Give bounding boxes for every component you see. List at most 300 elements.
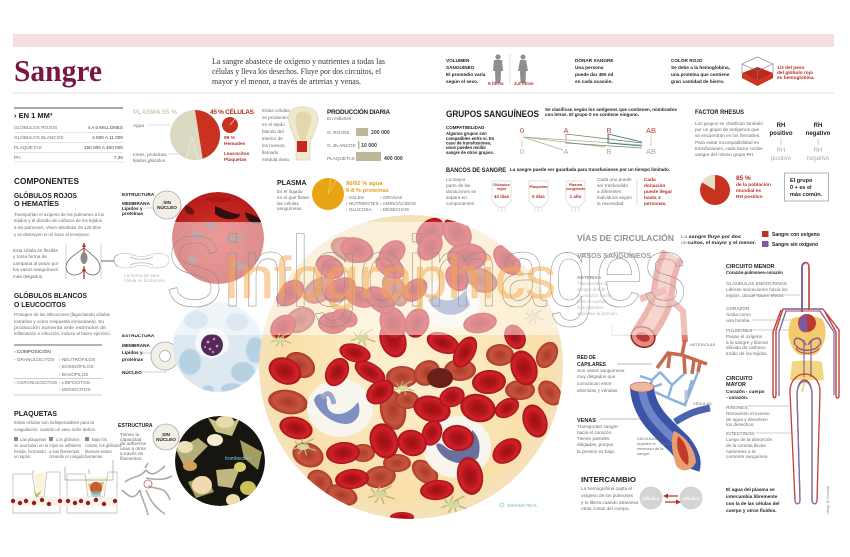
photo circle: platelets (175, 416, 265, 506)
text: circuito mayor: INTESTINOS: (726, 431, 755, 436)
panel: compatibilidad: COMPATIBILIDAD (446, 125, 485, 130)
chart: blood group compatibility (520, 126, 656, 156)
text: bone marrow (262, 108, 290, 162)
list: composición: › GRANULOCITOS (14, 357, 54, 362)
panel: intercambio: CÉLULA (643, 496, 659, 501)
text: water exchange: El agua del plasma se (726, 487, 775, 492)
intro text: mayor y el menor, a través de arterias y venas. (212, 77, 361, 86)
icon: biconcave cell (101, 253, 169, 283)
list: composición: › LINFOCITOS (59, 380, 90, 385)
heading: componentes: COMPONENTES (14, 176, 79, 186)
header fact: volumen sanguíneo: 5 litros (488, 81, 504, 87)
callout: donation: donación (644, 183, 665, 189)
illustration: capillary network (640, 340, 707, 405)
watermark band (118, 222, 688, 335)
label: válvulas (637, 436, 678, 456)
illustration: artery (628, 255, 716, 351)
text: plaquetas steps: rojos se adhieren (49, 443, 82, 448)
text: plasma: PLASMA (277, 180, 307, 187)
panel: intercambio: oxígeno de los pulmones (581, 493, 634, 498)
white blood cells (307, 278, 491, 478)
pie chart: 85 percent: RH positivo (736, 194, 763, 200)
text: plaquetas: Estas células son indispensables para la (14, 420, 94, 425)
label: válvulas: Impiden el (637, 441, 656, 446)
structure label: red cell: proteínas (122, 211, 143, 216)
text: circuito menor: traído de los tejidos. (726, 351, 768, 356)
heading: vías de circulación: La sangre fluye por dos (681, 234, 741, 239)
icon: blood bags: rojos (497, 187, 506, 191)
intro text (212, 57, 385, 86)
pie chart: plasma and cells: lípidos,glúcidos (133, 158, 166, 163)
heading: vías de circulación: circuitos, el mayor y el menor. (681, 240, 756, 245)
bar chart: daily production (327, 107, 403, 162)
text: bone marrow: interior de (262, 136, 283, 141)
text: water exchange: cuerpo y otros fluidos. (726, 508, 777, 513)
structure label: platelets: SIN (162, 432, 171, 437)
panel: factor rhesus: Los grupos se clasifican también (695, 121, 763, 126)
text: plaquetas steps: Bajo los (92, 437, 107, 442)
pie chart: plasma and cells: Plaquetas (224, 157, 247, 163)
icon: biconcave cell: La forma de esta (124, 273, 160, 278)
header fact: volumen sanguíneo: SANGUÍNEO (446, 63, 475, 70)
text: transfusion (597, 177, 632, 206)
list: plasma composition: › GLUCOSA (346, 207, 373, 212)
text: circuito menor: Liberan secreciones hacia los (726, 287, 788, 292)
text: plaquetas steps: herida, formando (14, 449, 46, 454)
panel: en 1 mm3: 4 500 A 11 000 (92, 135, 123, 140)
heading: grupos sanguíneos: GRUPOS SANGUÍNEOS (446, 109, 539, 120)
text: blood banks: parte de las (446, 183, 471, 188)
chart: blood group compatibility: A (563, 126, 569, 135)
heading: grupos sanguíneos: Se clasifican según los antígenos que contienen, nombrados (545, 107, 677, 112)
text: blood banks: La mayor (446, 177, 466, 182)
text: transfusion: ser trasfundido (597, 183, 628, 188)
panel: factor rhesus: RH (814, 123, 822, 129)
panel: factor rhesus: RH (777, 123, 785, 129)
list: plasma composition: › SALES (346, 195, 364, 200)
panel: factor rhesus: negativo (806, 131, 831, 137)
text: bone marrow: los huesos, (262, 143, 286, 148)
list: composición: › MONOCITOS (59, 387, 91, 392)
text: glóbulos blancos: inflamación e infección, incluso al hacer ejercicio. (14, 331, 111, 336)
text: plaquetas (14, 409, 96, 432)
text: arterias: soportan la presión. (577, 311, 618, 316)
text: plaquetas: PLAQUETAS (14, 409, 57, 418)
callout: donation (637, 177, 672, 207)
text: plaquetas: coagulación, cuando un vaso sufre daños. (14, 427, 96, 432)
callout box: 0 + es el (790, 185, 812, 191)
panel: compatibilidad: Algunos grupos son (446, 131, 487, 136)
panel: intercambio: La hemoglobina capta el (581, 486, 632, 491)
text: circuito mayor: los desechos. (726, 422, 755, 427)
text: bone marrow: médula ósea. (262, 157, 290, 162)
panel: intercambio (581, 475, 702, 511)
callout: donation: puede llegar (644, 189, 672, 195)
icon: biconcave cell: célula es bicóncava (124, 278, 165, 283)
text: arterias: Sus paredes (577, 305, 604, 310)
text: circuito menor: a la sangre y liberan (726, 340, 769, 345)
icon: hemoglobin cube: del glóbulo rojo (777, 70, 813, 76)
pie chart: plasma and cells: PLASMA 55 % (133, 109, 177, 116)
structure label: red cell: MEMBRANA (122, 201, 150, 206)
text: glóbulos rojos: campana al pasar por (13, 261, 59, 266)
photo circle: white blood cell (173, 302, 264, 395)
callout box (784, 173, 828, 201)
text: plasma: en el que flotan (277, 195, 309, 200)
text: venas: hacia el corazón. (577, 430, 612, 435)
panel: intercambio: otras zonas del cuerpo. (581, 506, 630, 511)
structure label: red cell: ESTRUCTURA (122, 192, 155, 197)
text: glóbulos rojos: a los pulmones. Viven alrededor de 120 días (14, 225, 102, 230)
text: plaquetas steps: creando el coágulo. (49, 454, 86, 459)
text: plaquetas steps: a sus filamentos, (49, 449, 80, 454)
text: plaquetas steps: Las plaquetas (20, 437, 46, 442)
panel: compatibilidad: caso de transfusiones, (446, 140, 491, 146)
text: glóbulos rojos: Transportan el oxígeno de los pulmones a los (14, 212, 105, 217)
text: glóbulos rojos (13, 191, 105, 279)
icon: activated platelet outline (122, 463, 172, 515)
panel: intercambio: y lo libera cuando atraviesa (581, 500, 638, 505)
text: circuito menor: CIRCUITO MENOR (726, 264, 775, 270)
illustration: vessel repair (11, 460, 117, 513)
header band (13, 34, 834, 47)
panel: en 1 mm3 (14, 108, 123, 162)
pie chart: plasma and cells: Hematíes (224, 141, 246, 147)
header fact: color rojo: COLOR ROJO (671, 58, 703, 63)
text: arterias: todo el cuerpo. (577, 299, 608, 304)
heading: grupos sanguíneos (446, 107, 677, 120)
list: plasma composition: › DESECHOS (380, 207, 409, 212)
text: glóbulos blancos: producción aumenta ante estímulos de (14, 325, 106, 330)
panel: factor rhesus: negativo (807, 156, 830, 162)
header fact: volumen sanguíneo: El promedio varía (446, 72, 486, 77)
heading: bancos de sangre (446, 167, 670, 174)
structure label: red cell: Lípidos y (122, 206, 143, 211)
text: circuito mayor: Remueven el exceso (726, 411, 770, 416)
text: circuito mayor: CIRCUITO (726, 376, 753, 382)
header fact: volumen sanguíneo: según el sexo. (446, 79, 478, 84)
label: válvulas: VÁLVULAS: (637, 436, 658, 441)
icon: blood bags: Plasma (569, 183, 583, 187)
text: plasma (277, 180, 309, 211)
bar chart: daily production: G. ROJOS (327, 130, 349, 135)
list: plasma composition: › NUTRIENTES (346, 201, 379, 206)
chart: blood group compatibility: A (563, 147, 569, 156)
text: blood banks: componentes. (446, 201, 475, 206)
structure label: white cell: MEMBRANA (122, 343, 150, 348)
icon: bone (289, 107, 318, 160)
text: arterias: sangre desde (577, 287, 606, 292)
bar chart: daily production: 10 000 (361, 143, 377, 149)
text: capilares: RED DE (577, 355, 597, 361)
pie chart: 85 percent: mundial es (736, 188, 761, 194)
text: arterias: el corazón hacia (577, 293, 612, 298)
list: composición: › EOSINÓFILOS (59, 363, 94, 369)
text: glóbulos rojos: tejidos y el dióxido de carbono de los tejidos (14, 218, 103, 223)
text: circuito menor: una bomba (726, 318, 750, 323)
text: plasma: sanguíneas. (277, 206, 303, 211)
pie chart: plasma and cells: 99 % (224, 135, 236, 141)
text: venas: VENAS (577, 418, 596, 424)
text: plasma: Es el líquido (277, 189, 303, 194)
text: transfusion: a diferentes (597, 189, 622, 194)
text: circuito menor: Pasan el oxígeno (726, 334, 763, 339)
legend: Sangre sin oxígeno (772, 242, 818, 248)
text: circuito menor: GLÁNDULAS ENDOCRINAS (726, 280, 787, 286)
text: bone marrow: llamado (262, 150, 279, 155)
list: plasma composition: › GRASAS (380, 195, 402, 200)
text: arterias: Transportan la (577, 281, 607, 286)
text: bone marrow: se producen (262, 115, 288, 120)
structure label: platelets (118, 423, 179, 461)
list: plasma composition: 6-8 % proteínas (346, 188, 389, 194)
chart: blood group compatibility: AB (646, 126, 656, 135)
panel: compatibilidad (446, 125, 495, 155)
text: circuito mayor (726, 376, 792, 459)
text: circuito mayor: Luego de la absorción (726, 437, 773, 442)
header fact: color rojo (671, 58, 730, 84)
panel: compatibilidad: compatibles entre sí. En (446, 136, 495, 141)
credit: Infogr. Nº Consejo (826, 486, 830, 514)
text: glóbulos rojos: más delgados. (13, 274, 44, 279)
text: venas: delgadas, porque (577, 442, 614, 447)
text: water exchange: con la de las células del (726, 501, 779, 506)
icon: blood bags: Glóbulos (493, 183, 510, 187)
text: arterias: VASOS SANGUÍNEOS (577, 251, 651, 260)
text: glóbulos rojos: O HEMATÍES (14, 199, 59, 208)
bar chart: daily production: PRODUCCIÓN DIARIA (327, 107, 390, 116)
panel: factor rhesus: Para evitar incompatibilidad en (695, 140, 759, 145)
header fact: donar sangre: en cada ocasión. (575, 79, 613, 84)
text: water exchange (726, 487, 779, 513)
icon: blood bags: Plaquetas (530, 185, 547, 189)
pie chart: plasma and cells: Agua (133, 123, 144, 128)
watermark text: outline: Sinlgoimages (165, 216, 687, 328)
text: transfusion: la necesidad. (597, 201, 625, 206)
illustration: vein (630, 382, 712, 470)
header fact: color rojo: una proteína que contiene (671, 72, 730, 77)
header fact: volumen sanguíneo: VOLUMEN (446, 58, 470, 63)
panel: en 1 mm3: 150 000 A 400 000 (84, 145, 123, 150)
callout: donation: hasta 3 (644, 195, 661, 201)
icon: plasma pie (312, 178, 344, 210)
text: capilares: comunican entre (577, 381, 612, 386)
panel: factor rhesus: positivo (769, 131, 793, 137)
panel: factor rhesus: RH (777, 148, 785, 154)
chart: blood group compatibility: 0 (520, 147, 524, 156)
panel: intercambio: CÉLULA (683, 496, 699, 501)
text: circuito menor: tejidos, donde hacen efecto. (726, 293, 785, 298)
structure label: platelets: a través de (120, 451, 144, 456)
label: tamaño real: TAMAÑO REAL (507, 503, 538, 508)
text: bone marrow: blando del (262, 129, 284, 134)
illustration: artery: ARTERIOLAS (690, 342, 716, 347)
heading: vías de circulación: VÍAS DE CIRCULACIÓN (577, 234, 674, 243)
text: circuito mayor: nutrientes a la (726, 449, 756, 454)
label: válvulas: sangre. (637, 451, 650, 456)
text: glóbulos rojos: los vasos sanguíneos (13, 267, 59, 272)
list: composición: › COMPOSICIÓN (14, 348, 51, 354)
callout: donation: Cada (644, 177, 656, 183)
icon: blood bags: 5 días (532, 194, 545, 199)
bar chart: daily production: G. BLANCOS (327, 143, 356, 148)
text: circuito menor: Actúa como (726, 312, 751, 317)
callout box: El grupo (790, 178, 813, 184)
text: glóbulos rojos: GLÓBULOS ROJOS (14, 191, 77, 200)
legend: Sangre con oxígeno (772, 232, 820, 238)
header fact: donar sangre (575, 58, 614, 84)
panel: en 1 mm3: GLÓBULOS BLANCOS (14, 134, 64, 140)
text: plasma: las células (277, 201, 300, 206)
text: circuito mayor: de la comida llevan (726, 443, 767, 448)
text: capilares: arteriolas y vénulas. (577, 388, 619, 393)
header fact: volumen sanguíneo (446, 54, 534, 87)
panel: factor rhesus: por un grupo de antígenos que (695, 127, 760, 132)
heading: bancos de sangre: La sangre puede ser guardada para transfusiones por un tiempo limitado. (510, 167, 670, 172)
illustration: vein: VÉNULAS (693, 401, 712, 406)
panel: compatibilidad: unos pueden recibir (446, 145, 486, 150)
title: Sangre (14, 53, 102, 88)
panel: intercambio: INTERCAMBIO (581, 475, 636, 484)
text: venas (577, 418, 640, 454)
intro text: La sangre abastece de oxígeno y nutrientes a todas las (212, 57, 385, 66)
callout: donation: personas. (644, 201, 667, 207)
text: capilares: Son vasos sanguíneos (577, 368, 625, 373)
structure label: platelets: capacidad (120, 437, 142, 442)
icon: hemoglobin cube: 1/3 del peso (777, 65, 805, 71)
structure label: white cell: Lípidos y (122, 350, 143, 355)
structure label: white cell: proteínas (122, 357, 143, 362)
text: circuito mayor: RIÑONES: (726, 404, 749, 410)
text: arterias (577, 251, 651, 335)
chart: blood group compatibility: 0 (520, 126, 524, 135)
text: venas: Transportan sangre (577, 424, 618, 429)
bar chart: daily production: 400 000 (384, 156, 403, 162)
text: plaquetas steps (14, 437, 122, 459)
text: plaquetas steps: Los glóbulos (56, 437, 80, 442)
text: glóbulos rojos: Esta célula es flexible (13, 248, 58, 253)
list: composición: › NEUTRÓFILOS (59, 356, 95, 362)
text: glóbulos blancos: extrañas y como respuesta inmunitaria). Su (14, 319, 104, 324)
icon: blood bags (492, 181, 586, 212)
bar chart: daily production: 200 000 (371, 130, 390, 136)
text: venas: Tienen paredes (577, 436, 610, 441)
pie chart: plasma and cells (133, 107, 255, 163)
panel: factor rhesus: transfusiones, cada factor recibe (695, 146, 763, 151)
header fact: donar sangre: puede dar 450 ml (575, 72, 613, 77)
chart: blood group compatibility: B (606, 147, 612, 156)
panel: factor rhesus: FACTOR RHESUS (695, 109, 745, 116)
icon: blood bags: 1 año (570, 194, 582, 199)
legend (762, 231, 820, 248)
structure label: white cell: NÚCLEO (122, 369, 142, 375)
icon: blood bags: 42 días (494, 194, 510, 199)
pie chart: 85 percent (700, 175, 771, 205)
structure label: platelets: filamentos. (120, 456, 143, 461)
text: glóbulos blancos: Protegen de las infecciones (fagocitando células (14, 312, 111, 317)
list: plasma composition: 90/92 % agua (346, 181, 383, 187)
panel: en 1 mm3: 4 A 6 MILLONES (88, 125, 123, 130)
text: circuito mayor: - corazón. (726, 395, 748, 400)
text: circuito mayor: Corazón - cuerpo (726, 389, 765, 394)
panel: factor rhesus: se encuentran en los hematíes. (695, 133, 760, 138)
diagram: circulatory system (773, 262, 839, 504)
icon: hemoglobin cube (742, 57, 815, 86)
text: blood banks: separa en (446, 195, 467, 200)
header fact: donar sangre: Una persona (575, 65, 604, 70)
intro text: células y lleva los desechos. Fluye por dos circuitos, el (212, 67, 382, 76)
text: circuito menor: CORAZÓN (726, 305, 749, 311)
panel: factor rhesus: positivo (771, 156, 792, 162)
panel: en 1 mm3: PH (14, 155, 21, 160)
structure label: red cell: NÚCLEO (157, 204, 177, 210)
label: válvulas: retroceso de la (637, 446, 664, 451)
text: glóbulos blancos (14, 291, 111, 336)
text: circuito menor: PULMONES (726, 328, 752, 333)
header fact: volumen sanguíneo: 3,5 litros (514, 81, 534, 87)
text: circuito menor (726, 264, 800, 356)
text: capilares: CAPILARES (577, 362, 607, 368)
header fact: color rojo: Se debe a la hemoglobina, (671, 65, 730, 70)
panel: en 1 mm3: › EN 1 MM³ (14, 111, 53, 120)
text: plaquetas steps: bacterias. (85, 454, 103, 459)
text: arterias: ARTERIAS (577, 275, 601, 280)
list: plasma composition: › AMINOÁCIDOS (380, 200, 416, 206)
header fact: donar sangre: DONAR SANGRE (575, 58, 614, 63)
pie chart: 85 percent: 85 % (736, 175, 751, 182)
text: glóbulos blancos: O LEUCOCITOS (14, 302, 66, 309)
panel: compatibilidad: sangre de otros grupos. (446, 150, 494, 155)
heading: grupos sanguíneos: con letras. El grupo 0 no contiene ninguno. (545, 112, 639, 117)
text: circuito mayor: de agua y disuelven (726, 417, 768, 422)
text: transfusion: individuos según (597, 195, 632, 200)
panel: factor rhesus: sangre del mismo grupo RH. (695, 152, 755, 157)
chart: blood group compatibility: B (606, 126, 612, 135)
panel: en 1 mm3: GLÓBULOS ROJOS (14, 124, 57, 130)
text: capilares: muy delgados que (577, 374, 616, 379)
icon: flexible cell in capillary (66, 243, 101, 279)
pie chart: 85 percent: de la población (736, 182, 771, 188)
icon: blood bags: congelado (566, 187, 586, 191)
pie chart: plasma and cells: Iones, proteínas (133, 152, 167, 157)
text: bone marrow: Estas células (262, 108, 290, 113)
list: composición: › BASÓFILOS (59, 371, 88, 377)
text: glóbulos blancos: GLÓBULOS BLANCOS (14, 291, 87, 300)
watermark text: orange: Infographics (223, 246, 556, 311)
callout box: más común. (790, 192, 823, 198)
pie chart: plasma and cells: 45 % CÉLULAS (210, 107, 255, 116)
heading: bancos de sangre: BANCOS DE SANGRE (446, 167, 506, 174)
list: composición (14, 345, 102, 395)
panel: en 1 mm3: PLAQUETAS (14, 145, 42, 150)
panel: factor rhesus (695, 109, 831, 162)
text: plaquetas steps: costos, los glóbulos (85, 443, 122, 448)
header fact: color rojo: gran cantidad de hierro. (671, 79, 724, 84)
panel: en 1 mm3: 7,36 (114, 155, 123, 160)
text: circuito menor: Corazón-pulmones-corazón (726, 270, 783, 275)
text: capilares (577, 355, 652, 393)
text: blood banks (446, 177, 477, 206)
text: glóbulos rojos: y se destruyen en el bazo al envejecer. (14, 232, 90, 237)
structure label: platelets: unas a otras (120, 446, 146, 451)
text: plaquetas steps: se acumulan en la (14, 443, 49, 448)
structure label: red cell: SIN (163, 200, 172, 205)
text: circuito mayor: corriente sanguínea (726, 454, 768, 459)
photo circle: red blood cells (172, 192, 264, 284)
structure label: platelets: Tienen la (120, 432, 140, 437)
text: plaquetas steps: blancos evitan (85, 449, 112, 454)
text: circuito menor: dióxido de carbono (726, 345, 766, 350)
